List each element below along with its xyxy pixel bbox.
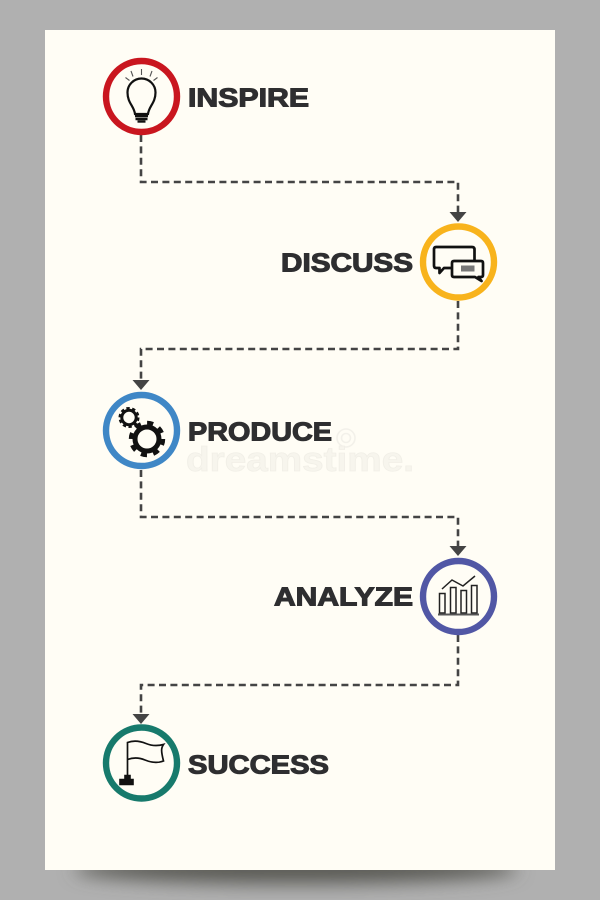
step: discuss xyxy=(281,226,494,298)
label: discuss: DISCUSS xyxy=(281,248,413,278)
ring: produce xyxy=(106,395,177,466)
connector: produce to analyze xyxy=(141,470,466,556)
label: analyze: ANALYZE xyxy=(274,582,413,612)
icon: flag xyxy=(120,741,164,785)
ring: inspire xyxy=(106,61,177,132)
ring: analyze xyxy=(423,561,494,632)
panel: card xyxy=(45,30,555,870)
icon: gears xyxy=(120,408,163,455)
card shadow xyxy=(74,854,518,884)
connector: inspire to discuss xyxy=(141,135,466,222)
step: success xyxy=(106,728,329,798)
label: produce: PRODUCE xyxy=(188,416,332,446)
step: analyze xyxy=(274,561,494,632)
step: produce xyxy=(106,395,332,466)
label: inspire: INSPIRE xyxy=(188,82,309,112)
ring: discuss xyxy=(423,226,494,298)
icon: light bulb xyxy=(126,69,158,122)
label: success: SUCCESS xyxy=(188,750,329,780)
connector: discuss to produce xyxy=(132,301,458,390)
icon: bar chart xyxy=(438,576,479,614)
connector: analyze to success xyxy=(132,635,458,724)
icon: speech bubbles xyxy=(434,247,483,281)
step: inspire xyxy=(106,61,309,132)
watermark: dreamstime. xyxy=(186,441,414,479)
watermark xyxy=(186,429,414,479)
ring: success xyxy=(106,728,177,798)
